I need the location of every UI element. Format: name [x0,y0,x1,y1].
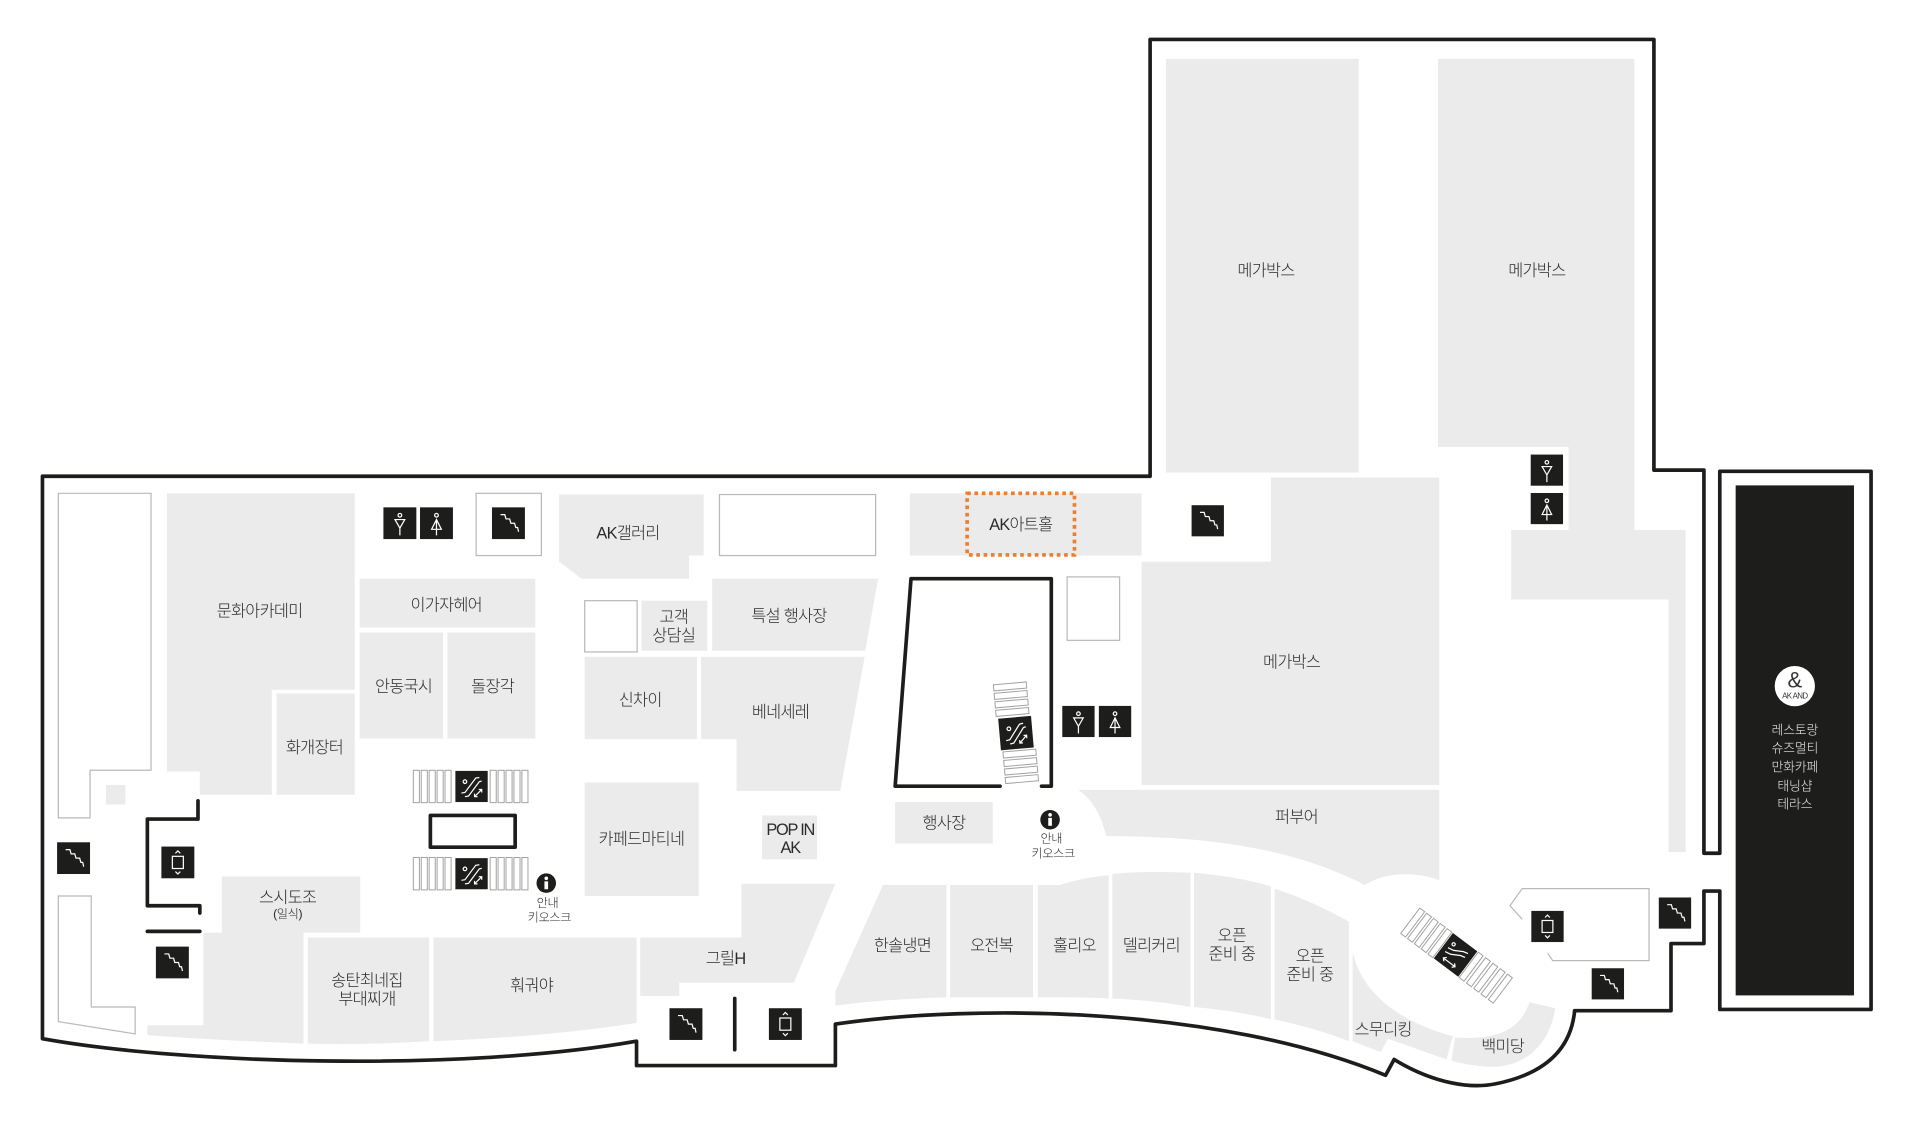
store: 메가박스 north-west [1166,59,1359,473]
service room: west lower [58,896,135,1034]
store: 고객 상담실 [641,601,707,651]
icon: male restroom [1531,455,1563,486]
kiosk: west: 키오스크 [528,911,571,925]
store: 오픈 준비 중: 준비 중 [1287,966,1334,984]
store: 메가박스 north-east [1438,59,1686,852]
store: 돌장각: 돌장각 [471,678,515,696]
store: 스시도조: (일식) [273,907,302,921]
store: 백미당: 백미당 [1481,1038,1525,1056]
store: 이가자헤어 [360,579,535,628]
store: 카페드마티네: 카페드마티네 [599,831,684,849]
store: 스시도조: 스시도조 [259,889,317,907]
void between escalators [430,815,515,847]
store: 스무디킹 [1353,952,1453,1059]
annex label list: 슈즈멀티 [1772,741,1818,756]
kiosk: west: 안내 [537,896,558,910]
store: 오픈 준비 중 [1275,889,1349,1041]
icon: female restroom [1099,706,1131,737]
store: 스무디킹: 스무디킹 [1355,1021,1412,1039]
service room: north [719,495,876,556]
store: 송탄최네집 부대찌개: 부대찌개 [338,990,396,1008]
annex label list: 만화카페 [1772,760,1818,775]
store: 메가박스 centre: 메가박스 [1263,654,1321,672]
service column [106,785,125,804]
store: 화개장터: 화개장터 [286,739,343,757]
store: 백미당 [1451,1002,1555,1067]
store: 그릴H: 그릴H [706,950,745,968]
store: 훌리오 [1038,875,1109,998]
icon: stairs southwest [156,947,189,978]
logo: AK&: & [1787,667,1802,692]
store: 이가자헤어: 이가자헤어 [411,596,482,614]
store: 송탄최네집 부대찌개 [308,937,429,1044]
escalator: east rotated [1401,908,1512,1003]
icon: stairs east [1659,897,1691,929]
store: 그릴H [640,884,835,996]
south divider wall [733,998,736,1050]
store: 행사장: 행사장 [923,815,966,833]
annex label list: 태닝샵 [1777,778,1813,793]
store: 훠궈야: 훠궈야 [510,977,554,995]
store: 퍼부어 [1078,790,1439,885]
stair room [476,493,541,556]
kiosk: centre: 키오스크 [1031,847,1075,861]
atrium wall [895,579,1051,786]
store: 신차이: 신차이 [619,692,662,710]
store: POP IN AK: POP IN [766,821,815,839]
service room: small [585,601,637,652]
store: 고객 상담실: 고객 [659,609,688,627]
store: 돌장각 [447,632,535,739]
logo: AK&: AK AND [1782,692,1808,701]
annex label list: 레스토랑 [1772,722,1818,737]
icon: elevator east [1531,911,1564,942]
store: AK아트홀: AK아트홀 [989,516,1053,534]
store: 오픈 준비 중 [1194,873,1271,1019]
icon: male restroom [383,507,416,539]
kiosk: centre: 안내 [1040,831,1062,845]
escalator: atrium [993,682,1039,784]
store: 특설 행사장 [712,579,878,651]
icon: female restroom [420,507,453,539]
west core wall lower [147,930,200,933]
store: 퍼부어: 퍼부어 [1275,809,1318,827]
store: AK아트홀 [910,493,1142,556]
store: 델리커리: 델리커리 [1123,937,1180,955]
service room: south-east outline [1510,889,1649,961]
panel: AK& annex [1736,485,1854,995]
icon: stairs west [57,842,90,874]
store: 베네세레: 베네세레 [752,704,809,722]
store: 안동국시 [360,632,443,739]
store: AK갤러리 [559,495,704,579]
store: 메가박스 north-east: 메가박스 [1508,262,1566,280]
store: 화개장터 [277,693,355,795]
store: 카페드마티네 [585,782,699,896]
icon: stairs south-east [1592,968,1624,999]
store: 베네세레 [701,657,865,791]
store: 신차이 [585,657,697,739]
store: 오픈 준비 중: 오픈 [1296,948,1325,966]
icon: elevator west [161,847,194,878]
store: 델리커리 [1112,872,1190,1007]
west core wall [147,801,200,913]
escalator: central upper [413,770,528,803]
store: 스시도조 [147,876,360,1044]
store: POP IN AK [762,815,817,859]
icon: male restroom [1062,706,1095,737]
store: 메가박스 north-west: 메가박스 [1237,262,1295,280]
store: 한솔냉면 [835,885,946,1006]
store: 메가박스 centre [1142,477,1439,785]
service room: west upper [58,493,151,818]
store: 오픈 준비 중: 준비 중 [1208,945,1256,963]
store: 특설 행사장: 특설 행사장 [751,607,827,625]
store: 행사장 [895,802,993,844]
store: culture academy [167,493,355,795]
logo: AK& [1775,666,1815,706]
store: AK갤러리: AK갤러리 [596,524,660,542]
icon: elevator south [769,1008,802,1040]
store: 송탄최네집 부대찌개: 송탄최네집 [331,972,403,990]
highlight: current location dotted frame [967,493,1074,555]
store: 오픈 준비 중: 오픈 [1218,927,1247,945]
kiosk: west [528,873,571,925]
store: 오전복: 오전복 [970,937,1014,955]
store: 오전복 [950,885,1033,997]
store: 한솔냉면: 한솔냉면 [874,937,931,955]
escalator: central lower [413,858,528,890]
annex label list: 테라스 [1777,797,1813,812]
service room: east of atrium [1067,577,1120,640]
store: 훌리오: 훌리오 [1053,937,1097,955]
annex label list [1772,722,1818,812]
icon: stairs south [669,1008,702,1040]
store: 고객 상담실: 상담실 [652,627,695,645]
kiosk: centre [1031,810,1075,861]
store: POP IN AK: AK [781,839,801,857]
store: culture academy: 문화아카데미 [217,602,302,620]
store: 안동국시: 안동국시 [375,678,432,696]
store: 훠궈야 [433,937,637,1041]
icon: female restroom [1531,493,1563,524]
icon: stairs east [1192,505,1224,536]
